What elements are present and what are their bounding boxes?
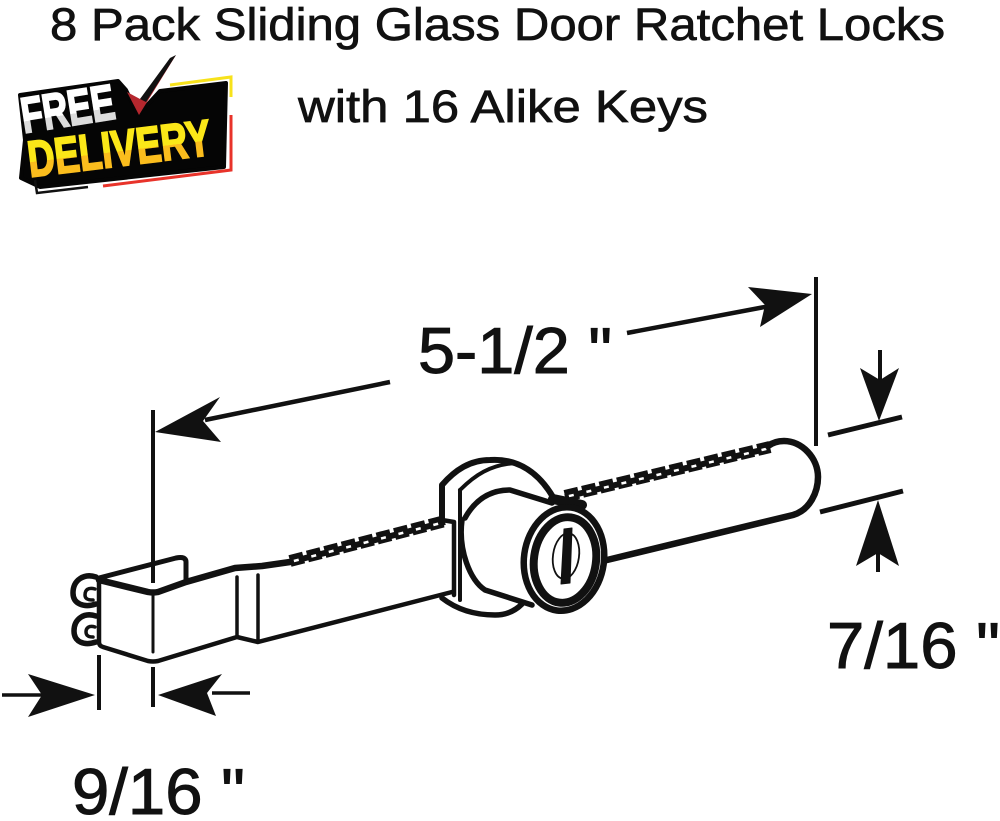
dimension: 7/16 inch diameter: 7/16 " (827, 609, 1000, 682)
ratchet teeth: left (290, 521, 445, 562)
badge: free delivery: DELIVERY (24, 109, 214, 188)
title: with 16 Alike Keys (297, 81, 708, 132)
dimension: 5-1/2 inch length (153, 277, 816, 583)
title (50, 0, 945, 132)
badge: free delivery: FREE (17, 74, 119, 144)
lock cylinder (442, 460, 611, 616)
dimension: 7/16 inch diameter (820, 350, 1000, 682)
badge: free delivery (17, 55, 231, 193)
dimension: 9/16 inch width (2, 655, 250, 821)
dimension: 5-1/2 inch length: 5-1/2 " (418, 314, 612, 387)
title: 8 Pack Sliding Glass Door Ratchet Locks (50, 0, 945, 50)
lock bar drawing (73, 441, 818, 662)
rounded bar end (607, 441, 818, 560)
ratchet teeth: right (565, 447, 770, 497)
rollers (73, 576, 96, 644)
bracket (99, 558, 452, 662)
